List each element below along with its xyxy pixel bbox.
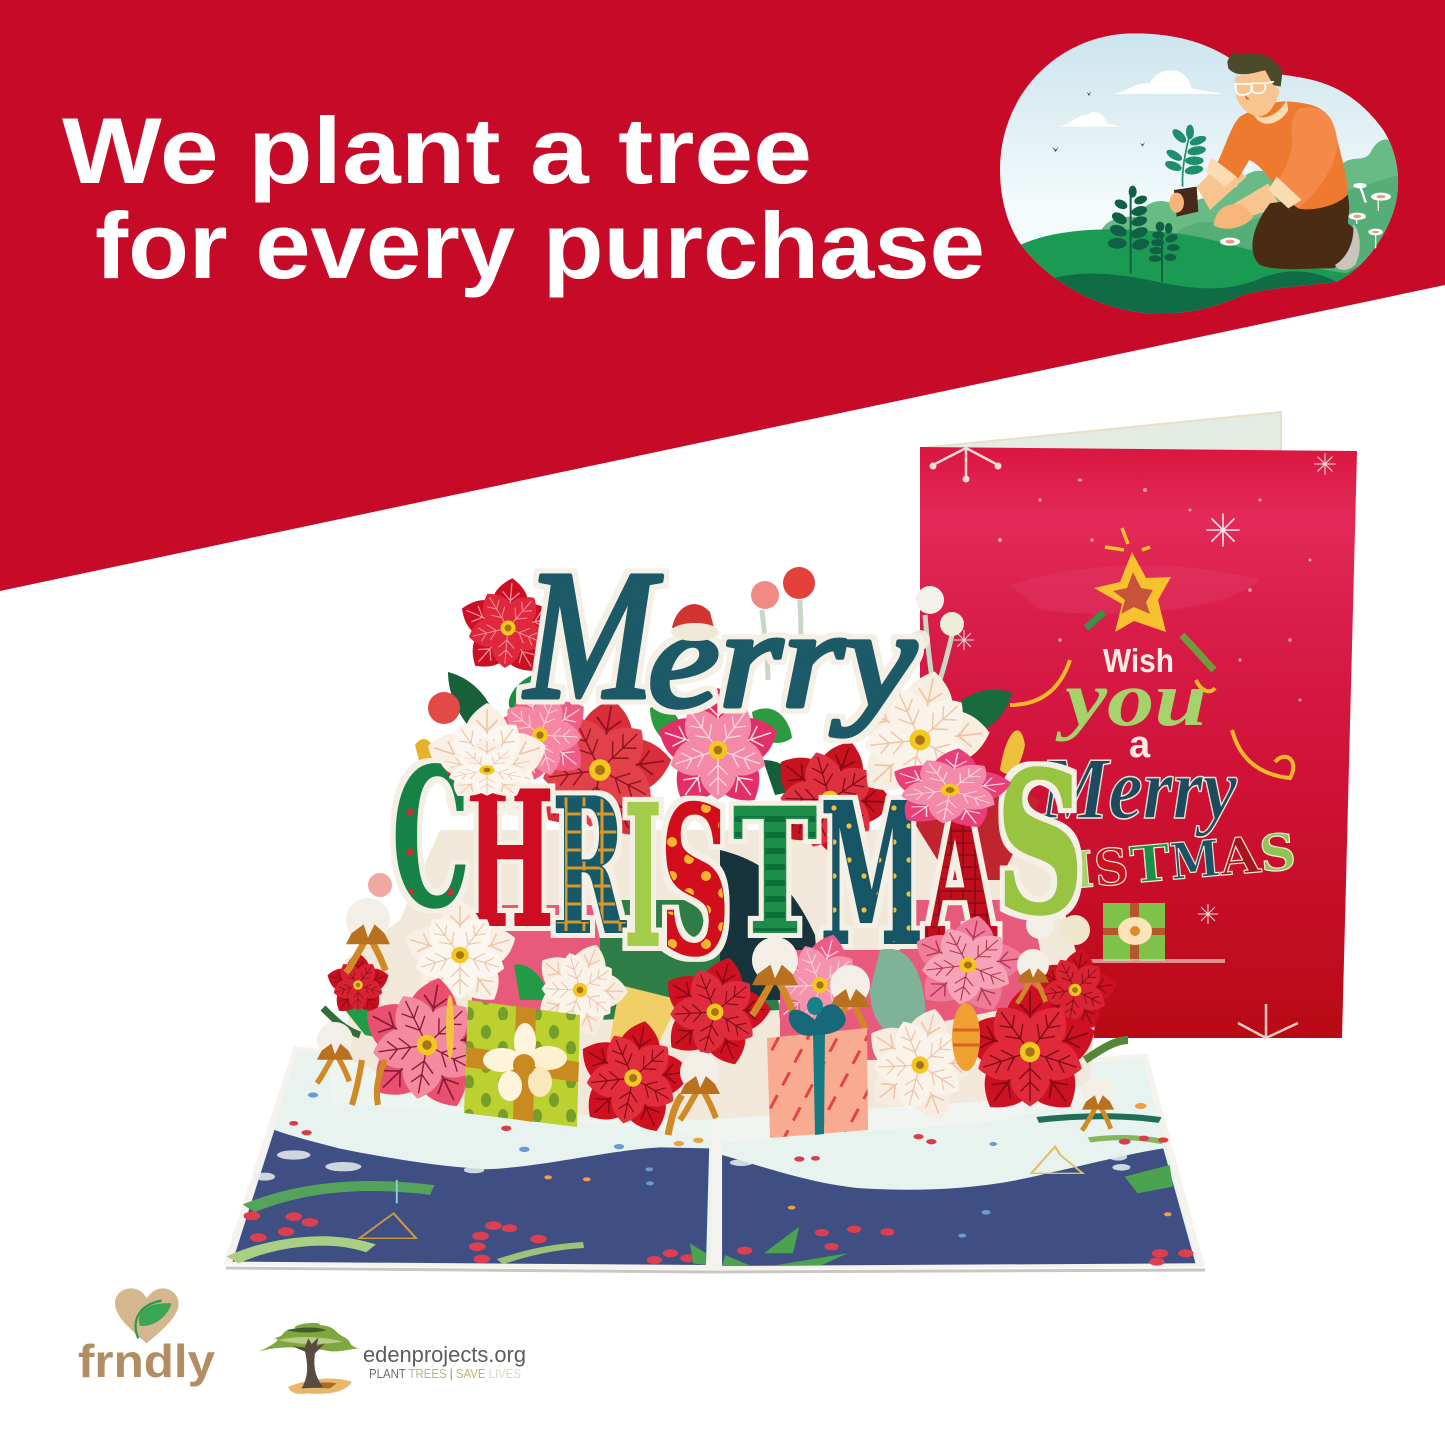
berries on stems <box>368 567 1090 945</box>
poinsettias behind <box>421 574 1007 882</box>
CHRISTMAS pop-up letters: R <box>552 757 627 976</box>
CHRISTMAS pop-up letters: S <box>660 762 730 1002</box>
card greeting text: S <box>1092 836 1131 898</box>
card greeting text: Wish <box>1103 642 1174 679</box>
card greeting text: T <box>1128 833 1173 895</box>
CHRISTMAS pop-up letters: M <box>820 760 924 989</box>
card swirls <box>1010 660 1293 778</box>
young trees <box>1108 186 1180 282</box>
logo: frndly: frndly <box>78 1335 215 1387</box>
illustration: man planting a tree <box>1000 33 1398 314</box>
pop-up card base <box>223 1046 1205 1272</box>
Merry script heading <box>522 533 917 738</box>
red diagonal banner <box>0 0 1445 591</box>
star ornament <box>1086 528 1214 670</box>
poinsettias on letters <box>434 738 1024 839</box>
gift flower <box>483 1023 567 1101</box>
leaves <box>323 672 1128 1060</box>
man <box>1169 52 1360 270</box>
title <box>62 98 985 298</box>
card greeting text: I <box>1071 839 1096 900</box>
CHRISTMAS pop-up letters: A <box>925 763 997 982</box>
CHRISTMAS pop-up letters: H <box>466 750 554 969</box>
CHRISTMAS pop-up letters: C <box>392 727 470 950</box>
greeting card cover <box>920 447 1357 1038</box>
frndly heart with leaf <box>115 1288 179 1343</box>
card texture and snow dots <box>998 478 1312 702</box>
Merry script heading: M <box>522 533 662 738</box>
sapling in hand <box>1164 125 1207 187</box>
title: We plant a tree <box>62 98 812 203</box>
cotton sprigs <box>317 898 1114 1135</box>
tree emblem <box>258 1323 358 1394</box>
CHRISTMAS pop-up letters: S <box>996 729 1084 958</box>
eden tagline: PLANT TREES | SAVE LIVES <box>369 1367 521 1381</box>
flowers in the meadow <box>1220 183 1391 248</box>
hanging ornaments <box>446 995 980 1071</box>
base decorations: pine and berries <box>233 1092 1194 1266</box>
eden wordmark: edenprojects.org <box>363 1342 526 1367</box>
navy night panels <box>233 1092 1195 1266</box>
title: for every purchase <box>95 193 985 298</box>
Merry script heading: erry <box>648 582 917 737</box>
lower flowers <box>324 900 1126 1149</box>
yellow-green gift box <box>464 1000 580 1127</box>
card greeting text: Merry <box>1038 741 1238 838</box>
card greeting text: you <box>1055 655 1207 742</box>
card greeting text: A <box>1216 825 1264 887</box>
snow panels <box>233 1050 712 1262</box>
logo: Eden Projects <box>258 1323 526 1394</box>
santa hat on Merry <box>671 604 719 641</box>
CHRISTMAS pop-up letters: T <box>733 770 817 973</box>
peach gift box <box>767 997 868 1138</box>
card greeting text: M <box>1168 828 1222 892</box>
logo: frndly <box>78 1288 215 1387</box>
flower mass behind letters <box>345 760 1095 1120</box>
pop-up wall <box>328 1020 1092 1142</box>
card greeting text <box>1038 642 1298 900</box>
snowflake ornaments <box>930 448 1335 1038</box>
card greeting text: a <box>1129 724 1151 766</box>
greeting card cover: back page <box>921 412 1281 450</box>
CHRISTMAS pop-up letters: I <box>624 762 662 991</box>
card gift <box>1075 903 1225 961</box>
CHRISTMAS pop-up letters <box>392 727 1084 1002</box>
card greeting text: S <box>1257 822 1298 884</box>
